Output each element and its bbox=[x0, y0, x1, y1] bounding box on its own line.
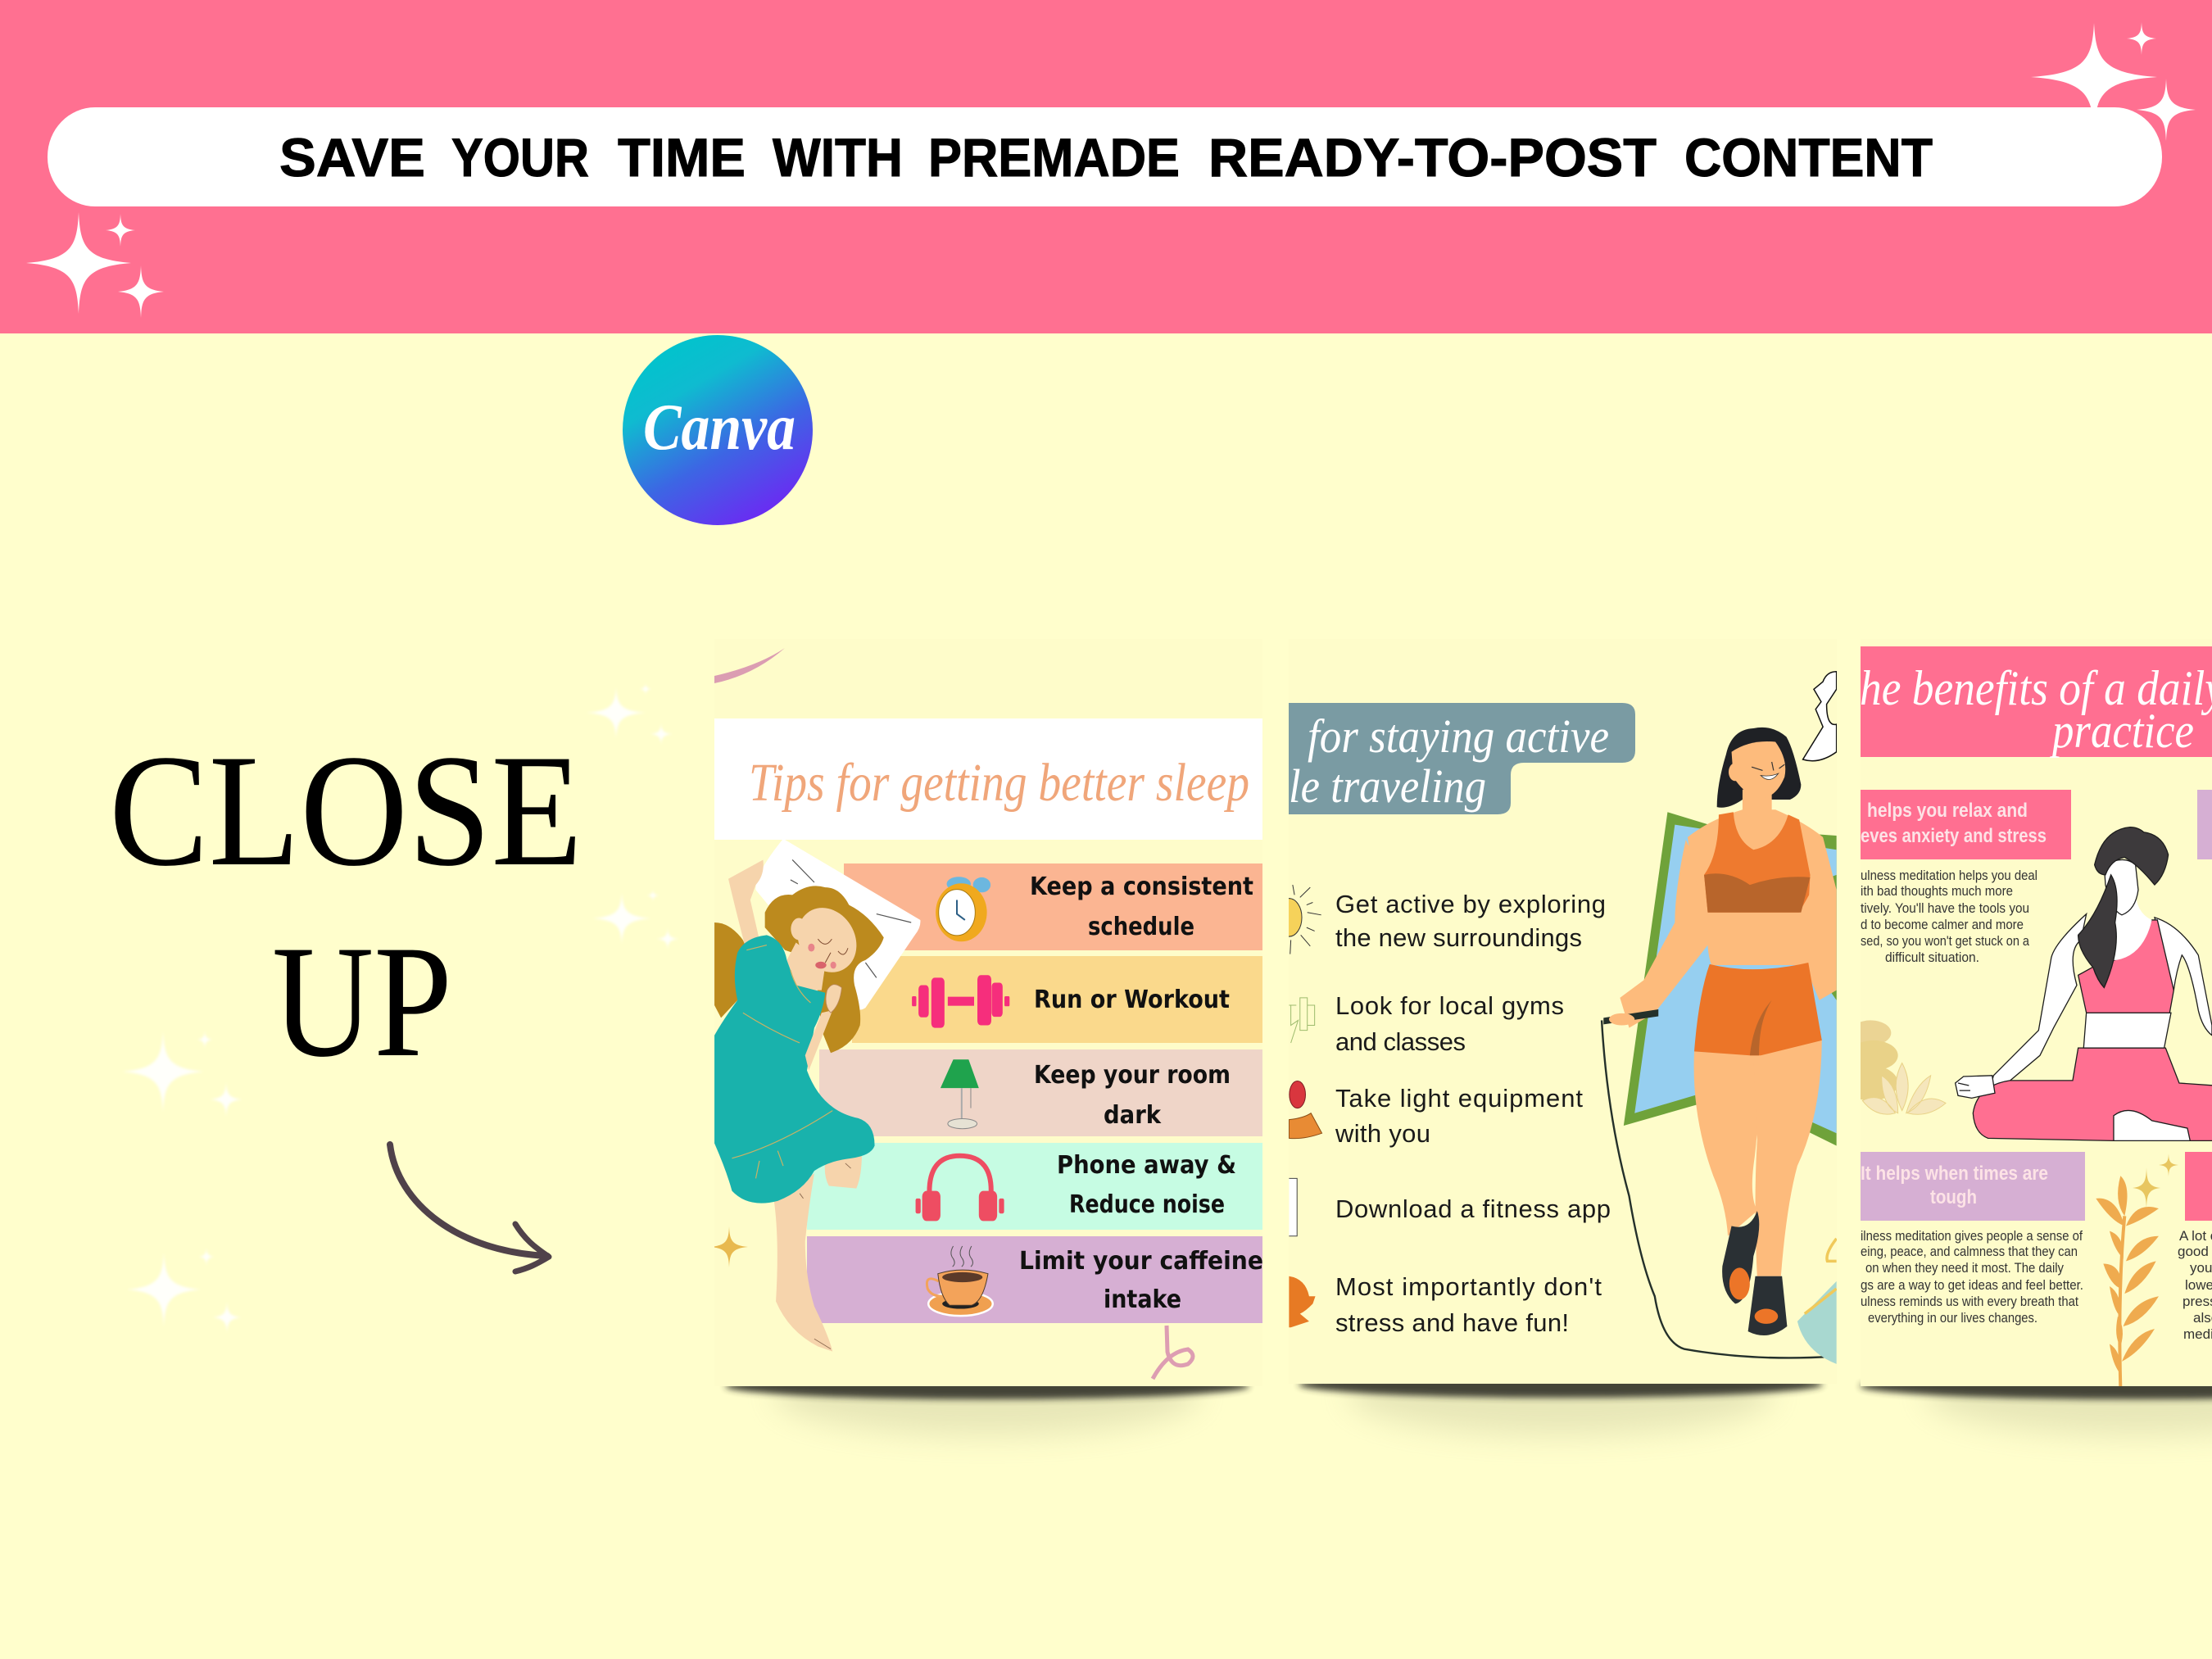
box: tough times text: It helps when times are bbox=[1861, 1163, 2048, 1185]
list text: with you bbox=[1335, 1119, 1430, 1148]
title block bbox=[1861, 646, 2212, 757]
tip labels: intake bbox=[1104, 1285, 1181, 1314]
tip labels: Reduce noise bbox=[1069, 1190, 1225, 1219]
panel title bbox=[1289, 709, 1609, 813]
list text: Get active by exploring bbox=[1335, 890, 1606, 918]
title text: WITH bbox=[773, 127, 903, 188]
sparkles: top right bbox=[2031, 22, 2196, 141]
coloured tip bands bbox=[807, 863, 1262, 1323]
illustration: meditating woman bbox=[1956, 827, 2212, 1140]
icon: stones and lotus bbox=[1843, 1020, 1946, 1114]
list icons bbox=[1289, 885, 1322, 1327]
box: relax text bbox=[1861, 800, 2047, 847]
panel: benefits of a daily practice bbox=[1843, 639, 2212, 1386]
close up heading bbox=[109, 722, 582, 1090]
list text: stress and have fun! bbox=[1335, 1308, 1569, 1337]
tip labels: Keep a consistent bbox=[1030, 873, 1253, 901]
header band bbox=[0, 0, 2212, 333]
icon: sun bbox=[1289, 885, 1321, 954]
body text: relax: sed, so you won't get stuck on a bbox=[1861, 933, 2029, 949]
box: relax text: helps you relax and bbox=[1867, 800, 2028, 822]
tip labels: schedule bbox=[1088, 913, 1194, 941]
list text: Take light equipment bbox=[1335, 1084, 1583, 1113]
icon: golden plant bbox=[2096, 1176, 2159, 1386]
box: relax bbox=[1861, 790, 2071, 859]
close up heading: UP bbox=[272, 913, 452, 1090]
panel title: practice bbox=[2049, 704, 2194, 758]
tip labels: dark bbox=[1104, 1101, 1162, 1130]
body text: tough times bbox=[1861, 1228, 2083, 1326]
close up heading: CLOSE bbox=[109, 722, 582, 900]
box: pink right edge bbox=[2185, 1152, 2212, 1221]
body text: relax bbox=[1861, 868, 2037, 965]
box: relax text: eves anxiety and stress bbox=[1861, 825, 2047, 847]
body text: right column fragment bbox=[2178, 1228, 2212, 1342]
panel: better sleep tips bbox=[710, 639, 1263, 1386]
box: tough times text bbox=[1861, 1163, 2048, 1208]
icon: headphones bbox=[916, 1156, 1004, 1221]
title text: YOUR bbox=[451, 127, 589, 188]
box: tough times text: tough bbox=[1930, 1186, 1977, 1208]
body text: tough times: ilness meditation gives people a sense of bbox=[1861, 1228, 2083, 1244]
title shape bbox=[1289, 703, 1635, 814]
title text: TIME bbox=[618, 127, 746, 188]
body text: relax: difficult situation. bbox=[1885, 950, 1979, 965]
icon: lamp bbox=[941, 1059, 979, 1129]
body text: tough times: eing, peace, and calmness that they can bbox=[1861, 1244, 2078, 1259]
icon: alarm clock bbox=[936, 877, 990, 941]
pink swoosh bbox=[714, 648, 785, 683]
icon: gym outline bbox=[1289, 998, 1315, 1043]
list text: Look for local gyms bbox=[1335, 991, 1564, 1020]
gold stars bbox=[2133, 1154, 2178, 1208]
box: tough times bbox=[1861, 1152, 2085, 1221]
sparkles: bottom left bbox=[26, 212, 164, 318]
body text: relax: d to become calmer and more bbox=[1861, 917, 2024, 932]
icon: phone bbox=[1289, 1178, 1297, 1236]
panel title bbox=[1860, 661, 2212, 758]
title text: SAVE bbox=[279, 127, 425, 188]
Canva logo: Canva bbox=[643, 392, 796, 464]
panel title: for staying active bbox=[1308, 709, 1609, 763]
title text: CONTENT bbox=[1684, 127, 1933, 188]
title strip bbox=[714, 718, 1262, 840]
title pill bbox=[48, 107, 2162, 206]
icon: yoyo bbox=[1290, 1081, 1305, 1108]
panel: staying active while traveling bbox=[1276, 639, 1837, 1384]
body text: relax: tively. You'll have the tools you bbox=[1861, 900, 2029, 916]
panel title: Tips for getting better sleep bbox=[749, 753, 1249, 813]
tip labels: Keep your room bbox=[1034, 1061, 1231, 1090]
icon: coffee cup bbox=[927, 1246, 993, 1316]
title text: READY-TO-POST bbox=[1208, 127, 1657, 188]
body text: tough times: ulness reminds us with every breath that bbox=[1861, 1294, 2078, 1309]
body text: relax: ith bad thoughts much more bbox=[1861, 883, 2013, 899]
body text: relax: ulness meditation helps you deal bbox=[1861, 868, 2037, 883]
body text: tough times: everything in our lives changes. bbox=[1868, 1310, 2037, 1326]
arrow to panels bbox=[390, 1145, 549, 1271]
illustration: sleeping girl bbox=[714, 839, 920, 1352]
icon: orange figure bbox=[1289, 1276, 1316, 1327]
icon: shoes bbox=[1289, 1113, 1322, 1139]
illustration: woman with jump rope bbox=[1602, 672, 1837, 1364]
panel title: le traveling bbox=[1289, 759, 1486, 813]
body text: tough times: on when they need it most. The daily bbox=[1865, 1260, 2064, 1276]
list text: and classes bbox=[1335, 1027, 1466, 1056]
tip labels: Phone away & bbox=[1057, 1151, 1236, 1180]
list text bbox=[1335, 890, 1611, 1337]
Canva logo bbox=[623, 335, 813, 525]
icon: dumbbell bbox=[912, 975, 1009, 1028]
box: purple right edge bbox=[2197, 790, 2212, 859]
title text: PREMADE bbox=[928, 127, 1180, 188]
tip labels: Limit your caffeine bbox=[1019, 1247, 1263, 1276]
list text: Most importantly don't bbox=[1335, 1272, 1602, 1301]
gold star and pink curl bbox=[710, 1226, 1193, 1379]
tip labels bbox=[1019, 873, 1263, 1314]
sparkles around close up bbox=[122, 682, 679, 1334]
list text: Download a fitness app bbox=[1335, 1194, 1611, 1223]
list text: the new surroundings bbox=[1335, 923, 1582, 952]
shadows under panels bbox=[725, 1353, 2212, 1435]
body text: tough times: gs are a way to get ideas and feel better. bbox=[1861, 1277, 2083, 1293]
tip labels: Run or Workout bbox=[1034, 986, 1230, 1014]
